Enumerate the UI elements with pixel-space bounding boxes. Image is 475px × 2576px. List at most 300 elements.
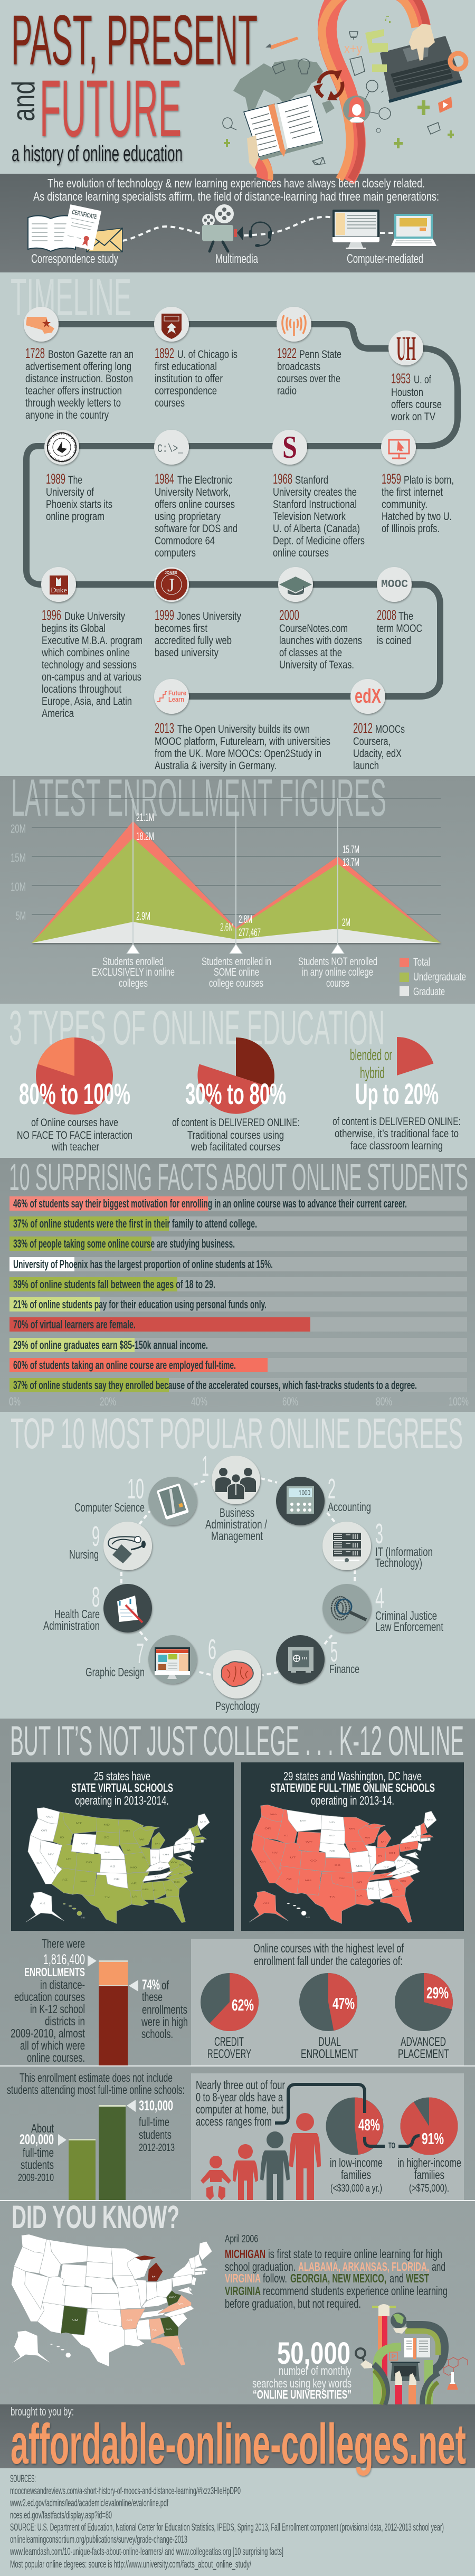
icon: safe — [288, 1647, 314, 1673]
US map: virtual schools: MS — [142, 1888, 149, 1891]
categories intro: enrollment fall under the categories of: — [254, 1954, 403, 1968]
dashed path — [122, 217, 395, 241]
fact text: 21% of online students pay for their education using personal funds only. — [13, 1298, 267, 1311]
US map: virtual schools: IL — [142, 1856, 146, 1859]
numbers: 7 — [136, 1638, 144, 1669]
enrollments text — [11, 1937, 85, 2064]
74 percent text: these — [142, 1990, 163, 2004]
event: 1922: courses over the — [277, 373, 340, 385]
bar tracks — [10, 1196, 467, 1392]
event: 2012: 2012 — [353, 720, 373, 736]
sources: www2.ed.gov/admins/lead/academic/evalonline/evalonline.pdf — [10, 2498, 168, 2509]
axis labels: 40% — [191, 1395, 207, 1408]
percent labels: 48% — [358, 2116, 380, 2134]
panel: latest enrollment figures — [11, 768, 466, 998]
categories intro — [253, 1941, 404, 1968]
event: 2013: The Open University builds its own — [177, 723, 310, 735]
pencil and hand — [372, 2304, 396, 2316]
pie labels: CREDIT — [214, 2035, 244, 2049]
numbers: 10 — [127, 1473, 144, 1505]
US map: virtual schools: CO — [86, 1861, 92, 1864]
US map: virtual schools: SC — [174, 1881, 180, 1883]
world map — [233, 59, 335, 114]
value labels: 277,467 — [239, 927, 261, 939]
sources: onlinelearningconsortium.org/publications/survey/grade-change-2013 — [10, 2534, 187, 2545]
US map: full-time schools: LA — [357, 1895, 363, 1898]
pie labels: ENROLLMENT — [301, 2047, 358, 2061]
descriptions: Traditional courses using — [187, 1129, 284, 1141]
event: 1984: Commodore 64 — [155, 535, 215, 547]
label: blended or hybrid: blended or — [350, 1046, 392, 1064]
descriptions: of Online courses have — [31, 1117, 118, 1129]
74 percent text: 74% — [142, 1977, 160, 1993]
US map: full-time schools: IL — [368, 1855, 372, 1857]
event: 1984 — [155, 471, 238, 559]
bar labels: students — [139, 2128, 172, 2141]
US map: virtual schools: NM — [80, 1880, 87, 1883]
income labels: families — [341, 2168, 371, 2182]
categories intro: Online courses with the highest level of — [253, 1941, 404, 1955]
event: 1728: anyone in the country — [25, 409, 109, 421]
income labels: (<$30,000 a yr.) — [330, 2183, 382, 2194]
US map: virtual schools: NY — [185, 1837, 191, 1840]
text: state requirements: VIRGINIA — [225, 2284, 261, 2298]
US map: full-time schools — [249, 1805, 436, 1923]
text: state requirements: before graduation, but not required. — [225, 2297, 361, 2310]
US map: virtual schools: AL — [153, 1889, 158, 1892]
descriptions: face classroom learning — [350, 1140, 443, 1152]
labels: Correspondence study — [31, 252, 118, 266]
US map: full-time schools: AR — [356, 1881, 363, 1884]
access text: access ranges from — [196, 2115, 272, 2128]
event: 1728: teacher offers instruction — [25, 385, 122, 397]
event: 2008: term MOOC — [377, 622, 422, 635]
orange band — [259, 0, 426, 180]
axis labels: 5M — [16, 909, 26, 922]
degree labels: Law Enforcement — [375, 1620, 443, 1634]
icon: Jones — [156, 569, 187, 600]
label: blended or hybrid: hybrid — [360, 1064, 385, 1082]
event: 1984: computers — [155, 547, 196, 559]
pie labels: PLACEMENT — [398, 2047, 449, 2061]
event: 1959: Plato is born, — [404, 474, 454, 486]
percent labels — [358, 2116, 444, 2148]
degree labels: Management — [211, 1529, 263, 1543]
typing hands — [395, 2371, 416, 2404]
panel: K-12 online — [0, 1717, 475, 2201]
event: 1953: 1953 — [391, 371, 411, 386]
degree circles — [103, 1456, 371, 1699]
event: 1984: University Network, — [155, 486, 231, 498]
text: state requirements: WEST — [406, 2271, 429, 2285]
US map: virtual schools: MO — [130, 1866, 137, 1869]
icon: brain — [222, 1662, 253, 1686]
icon: business people — [215, 1468, 256, 1499]
sources: www.learndash.com/10-unique-facts-about-online-learners/ and www.collegeatlas.org [10 surprising facts] — [10, 2546, 283, 2558]
open book — [244, 95, 323, 169]
intro text — [33, 176, 439, 203]
event: 1999 — [155, 607, 241, 659]
axis labels: 20M — [11, 822, 26, 835]
cycle arrows — [314, 70, 343, 100]
category labels: EXCLUSIVELY in online — [92, 966, 175, 978]
event: 1922: 1922 — [277, 345, 297, 361]
event: 1996: begins its Global — [42, 622, 106, 635]
event: 2000: University of Texas. — [279, 659, 354, 671]
bar labels: students — [21, 2158, 54, 2172]
icon: Duke — [50, 575, 68, 595]
event: 1989: The — [68, 474, 82, 486]
event: 1728: advertisement offering long — [25, 361, 131, 373]
axis labels: 20% — [100, 1395, 116, 1408]
US map: virtual schools: TX — [104, 1896, 110, 1899]
text: state requirements: April 2006 — [225, 2233, 258, 2245]
icon: FutureLearn: Learn — [168, 695, 184, 703]
74 percent text: were in high — [141, 2015, 188, 2028]
map panel: statewide full-time online schools — [241, 1762, 464, 1931]
event: 1922 — [277, 345, 341, 397]
event: 1959: the first internet — [382, 486, 443, 498]
US map: online learning requirements: GA — [166, 2328, 172, 2330]
map heading text — [270, 1769, 435, 1807]
event: 2008: 2008 — [377, 607, 396, 623]
US map: full-time schools: WI — [365, 1837, 370, 1839]
degree labels: IT (Information — [375, 1545, 433, 1559]
US map: virtual schools: WA — [46, 1816, 53, 1818]
icon: radio tower — [282, 315, 306, 336]
label: blended or hybrid — [350, 1046, 392, 1082]
axis labels: 15M — [11, 851, 26, 864]
event: 2013: 2013 — [155, 720, 174, 736]
map heading text: STATE VIRTUAL SCHOOLS — [71, 1781, 173, 1795]
illustration: online learning scene — [223, 0, 466, 180]
pie: up to 20 — [397, 1037, 433, 1075]
bar labels: full-time — [23, 2146, 54, 2159]
income labels: families — [414, 2168, 444, 2182]
icon: Jones: J — [167, 574, 175, 596]
access text: 0 to 8-year olds have a — [196, 2090, 283, 2104]
enrollments text: There were — [42, 1937, 85, 1950]
event: 1953: work on TV — [391, 411, 435, 423]
US map: full-time schools: OR — [264, 1827, 271, 1830]
stat: 50,000 searches: searches using key words — [252, 2376, 352, 2390]
text: state requirements: follow. — [263, 2271, 287, 2285]
74 percent text: of — [162, 1978, 169, 1992]
pie: credit recovery 62 — [201, 1973, 259, 2031]
event: 1728: Boston Gazette ran an — [48, 348, 134, 361]
event: 1999: Jones University — [177, 610, 241, 622]
US map: virtual schools: NC — [179, 1872, 186, 1875]
legend: Total — [413, 956, 430, 968]
icon: Plato monitor — [389, 440, 409, 459]
descriptions: of content is DELIVERED ONLINE: — [172, 1117, 300, 1129]
icon: Chicago shield — [162, 314, 182, 339]
event: 2012: Udacity, edX — [353, 748, 402, 760]
category labels: Students enrolled in — [202, 956, 271, 968]
panel: header — [6, 0, 466, 180]
bar labels: 2012-2013 — [139, 2142, 175, 2154]
icon: edX: edX — [355, 685, 381, 707]
US map: virtual schools: IN — [152, 1856, 156, 1859]
access text: Nearly three out of four — [196, 2078, 285, 2092]
sources: SOURCES: — [10, 2474, 36, 2485]
legend: Graduate — [413, 986, 445, 998]
numbers: 8 — [92, 1581, 100, 1613]
event: 2000: 2000 — [279, 607, 299, 623]
pie: credit recovery 62: 62% — [232, 1996, 254, 2014]
US map: full-time schools: NV — [272, 1852, 278, 1854]
US map: virtual schools: MT — [76, 1822, 82, 1825]
event: 1959 — [382, 471, 454, 535]
numbers: 4 — [375, 1582, 384, 1614]
enrollments text: education courses — [14, 1990, 85, 2004]
sources — [10, 2474, 444, 2570]
labels: Computer-mediated — [347, 252, 423, 266]
US map: virtual schools: MN — [124, 1829, 130, 1832]
US map: online learning requirements: WV — [169, 2296, 176, 2299]
US map: virtual schools: AK — [40, 1902, 46, 1905]
US map: full-time schools: TN — [379, 1874, 386, 1877]
US map: virtual schools: GA — [166, 1889, 173, 1892]
US map: full-time schools: NC — [406, 1871, 412, 1874]
74 percent text — [141, 1977, 188, 2041]
event: 1968: Stanford Instructional — [273, 498, 357, 511]
icon: stethoscope and book — [108, 1536, 146, 1563]
panel: brought to you by — [11, 2405, 466, 2476]
US map: full-time schools: ND — [328, 1822, 335, 1824]
US map: full-time schools: MT — [300, 1819, 306, 1822]
US map: full-time schools: AK — [263, 1902, 269, 1904]
bands — [374, 2316, 444, 2404]
area chart — [32, 798, 441, 954]
panel: 3 types of online education — [9, 1001, 461, 1153]
magnifier — [356, 2348, 372, 2369]
US map: virtual schools: LA — [132, 1895, 137, 1898]
panel: computer access — [191, 2073, 464, 2200]
stat: 50,000 searches: “ONLINE UNIVERSITIES” — [253, 2388, 352, 2401]
full-time estimate text — [7, 2071, 185, 2097]
globe — [391, 2313, 407, 2334]
pie labels: RECOVERY — [207, 2047, 251, 2061]
value labels: 2.8M — [239, 913, 252, 926]
stat: 50,000 searches — [252, 2336, 352, 2401]
event: 1984: The Electronic — [177, 474, 232, 486]
green plus signs and shapes — [365, 29, 388, 72]
dashed links — [121, 1478, 355, 1675]
map panel: state virtual schools — [11, 1762, 234, 1931]
event: 2013 — [155, 720, 330, 772]
play icon — [390, 2352, 397, 2360]
map heading text: 29 states and Washington, DC have — [283, 1769, 422, 1783]
pie labels: ADVANCED — [401, 2035, 446, 2049]
map heading text: operating in 2013-14. — [311, 1794, 394, 1807]
panel: intro and three generations — [28, 176, 439, 266]
74 percent text: enrollments — [142, 2003, 187, 2016]
icon: MOOC: MOOC — [381, 579, 408, 591]
icon: FutureLearn — [157, 689, 186, 703]
US map: full-time schools: TX — [329, 1895, 335, 1898]
US map: virtual schools — [26, 1807, 210, 1923]
US map: full-time schools: KY — [383, 1866, 390, 1869]
degree labels: Business — [220, 1506, 254, 1520]
title: and: and — [6, 81, 41, 121]
category labels: college courses — [209, 977, 263, 989]
US map: virtual schools: KY — [157, 1867, 164, 1870]
US map: virtual schools: AZ — [62, 1879, 68, 1881]
event: 1953: offers course — [391, 399, 442, 411]
event: 1996: Executive M.B.A. program — [42, 635, 142, 647]
event: 1996: Europe, Asia, and Latin — [42, 695, 132, 707]
event: 1968: U. of Alberta (Canada) — [273, 523, 360, 535]
US map: virtual schools: OR — [41, 1829, 48, 1832]
US map: full-time schools: GA — [392, 1889, 399, 1891]
event: 2008: is coined — [377, 635, 411, 647]
US map: virtual schools: HI — [81, 1917, 86, 1919]
event: 1996: which combines online — [41, 647, 130, 659]
pie: low income 48 — [326, 2097, 383, 2155]
pie labels: DUAL — [318, 2035, 341, 2049]
US map: full-time schools: WV — [397, 1860, 404, 1862]
pie: dual enrollment 47 — [299, 1973, 357, 2031]
category labels: in any online college — [302, 966, 373, 978]
full-time estimate text: students attending most full-time online schools: — [7, 2083, 185, 2097]
event: 1892: correspondence — [155, 385, 217, 397]
icon: Jones: JONES — [165, 571, 177, 575]
US map: full-time schools: MI — [381, 1841, 386, 1843]
bar labels — [18, 2098, 175, 2184]
US map: full-time schools: KS — [335, 1864, 341, 1867]
event: 1953: Houston — [391, 386, 423, 399]
US map: virtual schools: SD — [103, 1836, 110, 1839]
pie: advanced placement 29 — [395, 1973, 453, 2031]
axis labels: 10M — [11, 880, 26, 893]
US map: virtual schools: IA — [127, 1849, 131, 1852]
event: 1892 — [155, 345, 238, 409]
event: 1892: 1892 — [155, 345, 174, 361]
laptop — [380, 24, 462, 101]
axis labels: 80% — [376, 1395, 392, 1408]
value labels — [136, 812, 359, 939]
panel: top 10 degrees — [0, 1410, 475, 1719]
icon: graphic design monitor — [155, 1647, 190, 1679]
pie: advanced placement 29: 29% — [426, 1984, 449, 2002]
legend — [400, 956, 466, 998]
bar labels: 2009-2010 — [18, 2172, 54, 2184]
event: 2012 — [353, 720, 405, 772]
event: 1892: first educational — [155, 361, 217, 373]
icon: tablet with wrench — [156, 1483, 189, 1520]
US map: online learning requirements: FL — [178, 2347, 183, 2349]
big percentages — [19, 1077, 439, 1110]
heading: timeline: TIMELINE — [11, 268, 131, 326]
enrollments text: all of which were — [20, 2039, 85, 2052]
labels: Multimedia — [215, 252, 258, 266]
axis labels: 60% — [282, 1395, 298, 1408]
text: state requirements: GEORGIA, NEW MEXICO, — [290, 2271, 386, 2285]
US map: virtual schools: WV — [170, 1861, 178, 1864]
descriptions: web facilitated courses — [191, 1141, 280, 1153]
event: 1892: U. of Chicago is — [177, 348, 238, 361]
event: 1959: Hatched by two U. — [382, 511, 452, 523]
text: state requirements: and — [432, 2260, 445, 2273]
degree labels: Accounting — [328, 1500, 371, 1514]
degree labels — [43, 1500, 443, 1713]
income labels: (>$75,000). — [409, 2183, 449, 2194]
icon: Stanford S: S — [282, 430, 297, 465]
pie labels — [207, 2035, 449, 2061]
event: 1989: 1989 — [46, 471, 65, 487]
axis labels — [11, 822, 26, 922]
event: 1922: radio — [277, 385, 297, 397]
value labels: 21.1M — [136, 812, 154, 824]
open book — [404, 2338, 430, 2359]
icon: calculator — [287, 1486, 314, 1514]
event: 1984: software for DOS and — [155, 523, 238, 535]
event: 1959: community. — [382, 498, 428, 511]
panel: course categories — [191, 1939, 464, 2065]
degree labels: Psychology — [215, 1699, 260, 1713]
event: 2000: of classes at the — [279, 647, 342, 659]
US map: virtual schools: NE — [104, 1851, 111, 1854]
fact text — [13, 1197, 417, 1392]
event: 2000: CourseNotes.com — [279, 622, 348, 635]
icon: multimedia camera — [202, 204, 271, 251]
access text — [196, 2078, 285, 2128]
text: state requirements: MICHIGAN — [225, 2247, 265, 2261]
heading: DID YOU KNOW? — [12, 2199, 179, 2235]
US map: virtual schools: ND — [103, 1824, 110, 1826]
icon: calculator: 1000 — [299, 1488, 310, 1497]
event: 2008 — [377, 607, 422, 647]
US map: virtual schools: AR — [131, 1882, 137, 1885]
event: 1996: 1996 — [42, 607, 61, 623]
US map: full-time schools: NM — [305, 1880, 312, 1882]
US map: full-time schools: ME — [426, 1818, 433, 1821]
US map: virtual schools: ME — [200, 1821, 207, 1824]
bar labels: About — [31, 2121, 54, 2135]
numbers — [92, 1450, 384, 1669]
event: 1996: technology and sessions — [42, 659, 137, 671]
event: 1984: 1984 — [155, 471, 174, 487]
sources: Most popular online degrees: source is http://www.university.com/facts_about_online_study/ — [10, 2559, 251, 2570]
event: 1968: Stanford — [295, 474, 328, 486]
fact text: 29% of online graduates earn $85-150k annual income. — [13, 1338, 208, 1352]
income labels — [330, 2156, 461, 2194]
play button — [438, 97, 452, 113]
numbers: 9 — [92, 1521, 100, 1552]
enrollments text: ENROLLMENTS — [24, 1965, 85, 1979]
stat: 50,000 searches: number of monthly — [279, 2364, 352, 2377]
event: 1968: Dept. of Medicine offers — [273, 535, 365, 547]
text: state requirements: and — [390, 2271, 404, 2285]
US map: full-time schools: WY — [306, 1841, 313, 1843]
value labels: 13.7M — [343, 856, 359, 869]
US map: full-time schools: IN — [378, 1855, 382, 1857]
event: 1989: University of — [46, 486, 94, 498]
sources: nces.ed.gov/fastfacts/display.asp?id=80 — [10, 2510, 112, 2521]
text: TO: TO — [388, 2141, 395, 2150]
avatar — [343, 80, 391, 133]
timeline track — [26, 324, 458, 696]
category labels: Students NOT enrolled — [298, 956, 377, 968]
icon: correspondence — [28, 204, 122, 252]
bar fills — [10, 1196, 310, 1392]
text: state requirements: VIRGINIA — [225, 2271, 261, 2285]
event: 1892: courses — [155, 397, 185, 409]
icon: health form — [117, 1596, 142, 1622]
event: 1996: America — [42, 707, 74, 720]
event: 1922: broadcasts — [277, 361, 320, 373]
